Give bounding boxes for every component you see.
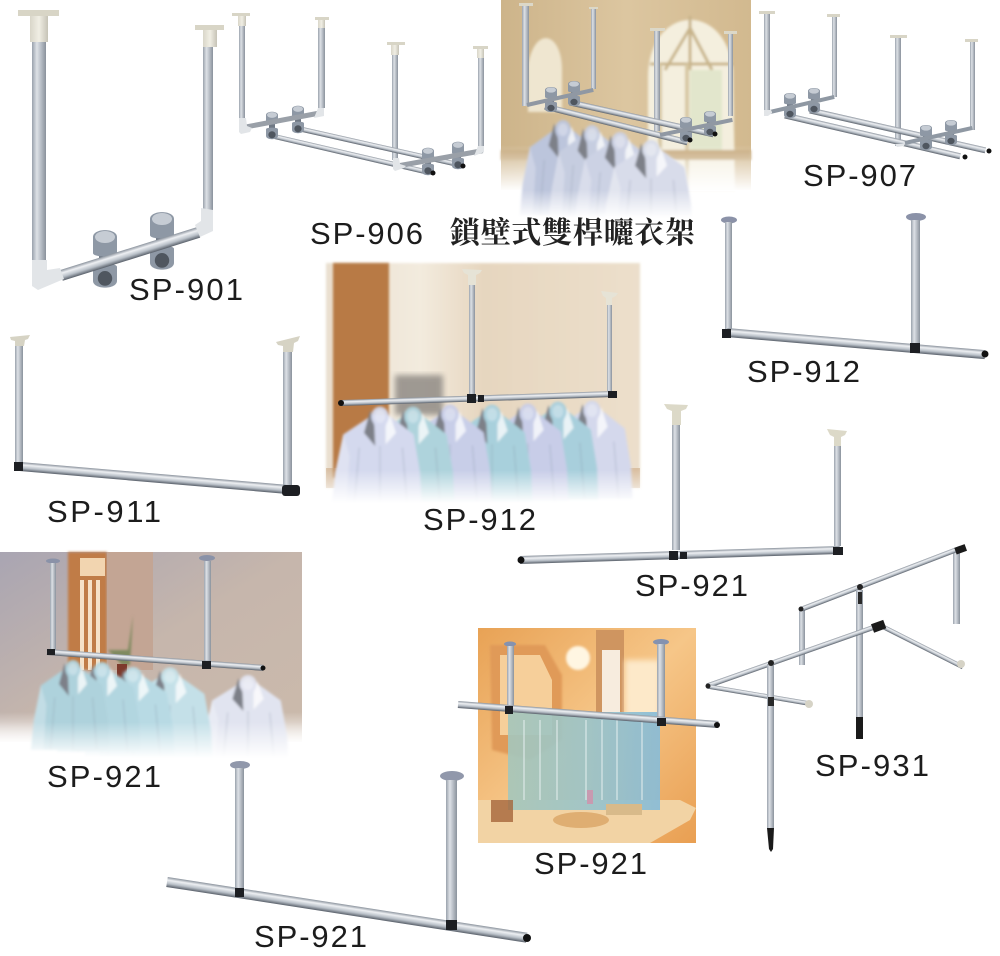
product: SP-931 folding rack <box>706 544 967 852</box>
label: SP-906 double-rod wall rack title <box>310 216 695 251</box>
label: SP-912 photo: SP-912 <box>423 502 536 537</box>
product: SP-921 rack, centre <box>518 404 847 564</box>
label: SP-921 bottom: SP-921 <box>254 919 367 954</box>
label: SP-911: SP-911 <box>47 494 161 529</box>
label: SP-906 double-rod wall rack title: 鎖壁式雙桿曬衣架 <box>450 216 695 250</box>
product: SP-911 rack <box>10 335 300 496</box>
product: SP-907 rack <box>759 11 992 160</box>
label: SP-921 centre: SP-921 <box>635 568 748 603</box>
label: SP-906 double-rod wall rack title: SP-906 <box>310 216 423 251</box>
label: SP-921 photo: SP-921 <box>47 759 161 794</box>
label: SP-907: SP-907 <box>803 158 916 193</box>
photo: SP-921 shirts by window <box>0 552 302 765</box>
label: SP-901: SP-901 <box>129 272 243 307</box>
photo: SP-921 bathroom with curtain <box>458 628 720 843</box>
product: SP-921 rack, bottom <box>166 761 531 943</box>
label: SP-931: SP-931 <box>815 748 929 783</box>
photo: SP-906 shirts in arched-window room <box>501 0 751 236</box>
label: SP-921 bathroom: SP-921 <box>534 846 647 881</box>
photo: SP-912 shirts in beige room <box>322 263 642 505</box>
label: SP-912 upper right: SP-912 <box>747 354 860 389</box>
product: SP-906 rack <box>232 13 488 176</box>
product: SP-912 rack, upper right <box>721 213 988 359</box>
product: SP-901 large rack <box>18 10 224 290</box>
